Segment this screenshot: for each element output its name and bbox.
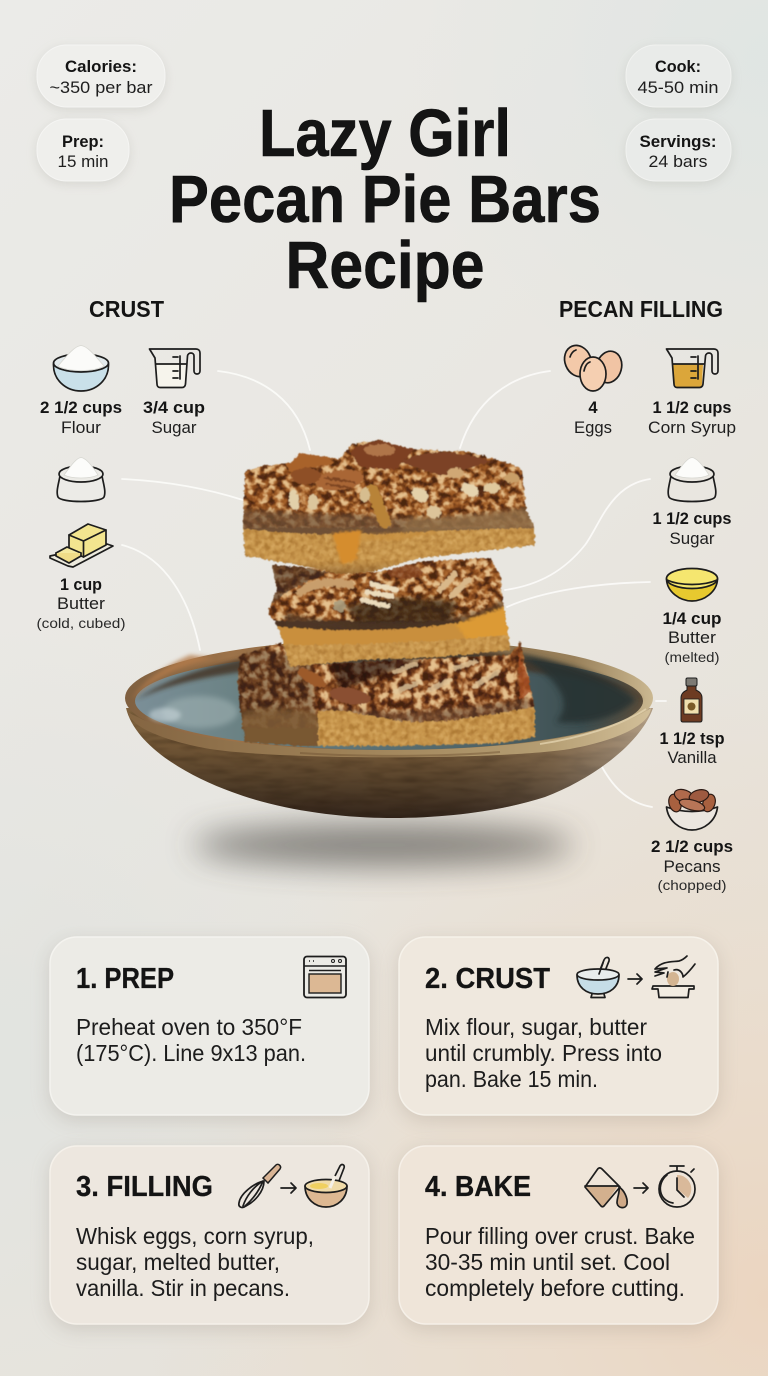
step heading: 2. CRUST xyxy=(425,963,550,995)
heading: pecan filling: PECAN FILLING xyxy=(559,296,723,322)
icon: pecan bowl xyxy=(666,787,718,830)
connector lines xyxy=(122,371,666,807)
badge: cook time xyxy=(626,45,731,107)
step text: Mix flour, sugar, butter xyxy=(425,1014,647,1040)
ingredient: filling sugar: Sugar xyxy=(670,530,715,548)
badge: prep time xyxy=(37,119,129,181)
ingredient: melted butter: 1/4 cup xyxy=(662,610,722,628)
ingredient: corn syrup: 1 1/2 cups xyxy=(652,399,732,417)
step heading: 4. BAKE xyxy=(425,1171,531,1203)
ingredient: butter: 1 cup xyxy=(60,576,102,594)
step text: completely before cutting. xyxy=(425,1275,685,1301)
title xyxy=(169,96,601,303)
icon: pouring jug to timer xyxy=(585,1166,695,1208)
badge: calories: Calories: xyxy=(65,58,137,76)
step text: sugar, melted butter, xyxy=(76,1249,280,1275)
step text: until crumbly. Press into xyxy=(425,1040,662,1066)
step text xyxy=(425,1223,695,1301)
icon: vanilla bottle xyxy=(681,678,702,722)
ingredient: sugar 3/4 cup xyxy=(143,349,205,437)
ingredient: pecans: 2 1/2 cups xyxy=(651,838,733,856)
badge: cook time: Cook: xyxy=(655,58,701,76)
ingredient: eggs: 4 xyxy=(588,399,598,417)
icon: oven xyxy=(304,956,346,998)
ingredient: flour xyxy=(40,346,122,437)
ingredient: vanilla xyxy=(660,678,724,767)
step text: 30-35 min until set. Cool xyxy=(425,1249,670,1275)
step text xyxy=(76,1223,314,1301)
step text: Pour filling over crust. Bake xyxy=(425,1223,695,1249)
badge: prep time: 15 min xyxy=(58,153,108,171)
ingredient: filling sugar xyxy=(652,458,732,548)
plate shadow xyxy=(193,824,573,866)
badge: calories xyxy=(37,45,165,107)
icon: flour bowl xyxy=(53,346,109,391)
ingredient: pecans: (chopped) xyxy=(658,877,726,893)
step text: (175°C). Line 9x13 pan. xyxy=(76,1040,306,1066)
ingredient: butter: Butter xyxy=(57,595,106,613)
plate front rim xyxy=(128,708,651,757)
ingredient: filling sugar: 1 1/2 cups xyxy=(652,510,732,528)
badge: calories: ~350 per bar xyxy=(50,79,153,97)
ingredient: corn syrup xyxy=(648,349,736,437)
badge: prep time: Prep: xyxy=(62,133,104,151)
step heading: 3. FILLING xyxy=(76,1171,213,1203)
ingredient: eggs: Eggs xyxy=(574,419,612,437)
icon: crust sugar bowl xyxy=(57,458,105,502)
ingredient: corn syrup: Corn Syrup xyxy=(648,419,736,437)
panel: step 2 crust xyxy=(399,937,718,1115)
ingredient: flour: 2 1/2 cups xyxy=(40,399,122,417)
icon: melted butter bowl xyxy=(666,568,718,601)
icon: whisk to bowl xyxy=(239,1164,347,1207)
step text: Whisk eggs, corn syrup, xyxy=(76,1223,314,1249)
ingredient: butter xyxy=(36,524,126,631)
step text: pan. Bake 15 min. xyxy=(425,1066,598,1092)
panel: step 4 bake xyxy=(399,1146,718,1324)
step text: Preheat oven to 350°F xyxy=(76,1014,302,1040)
step text xyxy=(425,1014,662,1092)
middle bar xyxy=(267,557,511,668)
ingredient: melted butter: (melted) xyxy=(664,649,720,665)
ingredient: flour: Flour xyxy=(61,419,102,437)
step text xyxy=(76,1014,306,1066)
icon: eggs xyxy=(560,341,625,391)
badge: servings: 24 bars xyxy=(648,153,708,171)
ceramic plate xyxy=(120,639,660,825)
ingredient: melted butter: Butter xyxy=(668,629,717,647)
photo: pecan pie bars on ceramic plate xyxy=(120,435,660,866)
badge: servings xyxy=(626,119,731,181)
title: Pecan Pie Bars xyxy=(169,162,601,237)
ingredient: eggs xyxy=(560,341,625,437)
badge: servings: Servings: xyxy=(640,133,716,151)
top bar xyxy=(236,435,542,580)
step text: vanilla. Stir in pecans. xyxy=(76,1275,290,1301)
icon: measuring cup xyxy=(150,349,200,388)
ingredient: melted butter xyxy=(662,568,722,665)
badge: cook time: 45-50 min xyxy=(638,79,718,97)
icon: sugar bowl xyxy=(668,458,716,502)
ingredient: vanilla: Vanilla xyxy=(668,749,717,767)
icon: syrup measuring cup xyxy=(666,349,718,388)
ingredient: sugar 3/4 cup: Sugar xyxy=(152,419,197,437)
ingredient: pecans xyxy=(651,787,733,893)
step heading: 1. PREP xyxy=(76,963,174,995)
icon: butter dish xyxy=(50,524,113,567)
title: Recipe xyxy=(286,228,484,303)
panel: step 1 prep xyxy=(50,937,369,1115)
bottom bar xyxy=(230,635,540,750)
title: Lazy Girl xyxy=(259,96,511,171)
ingredient: sugar 3/4 cup: 3/4 cup xyxy=(143,399,205,417)
heading: crust: CRUST xyxy=(89,296,164,322)
ingredient: pecans: Pecans xyxy=(664,858,720,876)
icon: mixing bowl to pan xyxy=(577,956,695,998)
panel: step 3 filling xyxy=(50,1146,369,1324)
ingredient: butter: (cold, cubed) xyxy=(36,615,126,631)
ingredient: vanilla: 1 1/2 tsp xyxy=(660,730,724,748)
